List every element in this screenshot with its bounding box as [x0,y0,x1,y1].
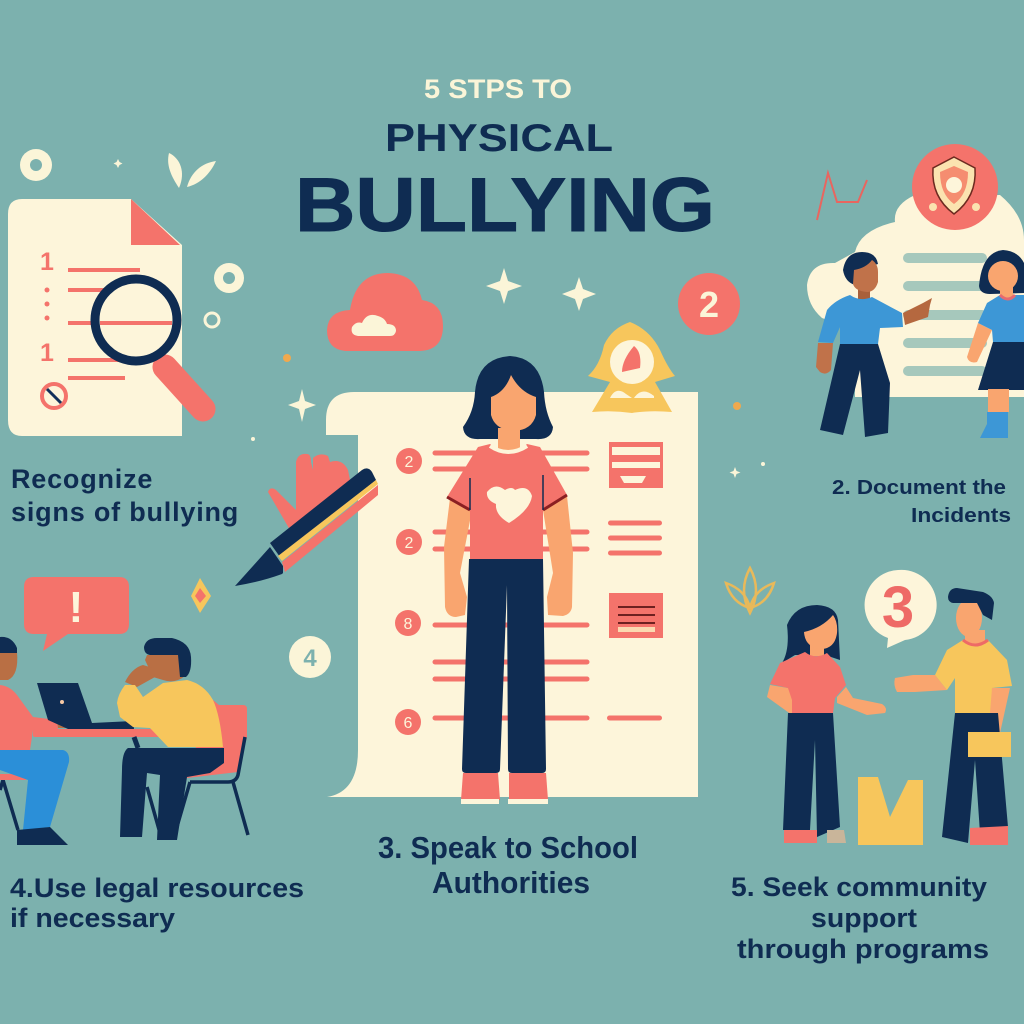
icon: small circle badge: 4 [303,645,317,672]
panel: central list document: 6 [404,715,413,732]
text: step 1 label: Recognize [11,464,153,494]
icon: ribbon award [588,322,675,413]
badge: number 2: 2 [699,284,719,325]
text: step 4 label: if necessary [10,903,175,933]
title [295,74,715,248]
figure: central student [444,356,573,804]
shoes [461,773,500,800]
icon: small circle badge [289,636,331,678]
speech bubble: exclamation [24,577,129,651]
arms [444,498,472,617]
figure: girl in coral [767,605,886,843]
text: step 3 label: 3. Speak to School [378,830,638,865]
title: BULLYING [295,163,715,248]
text: step 5 label: support [811,903,917,933]
text: step 5 label: through programs [737,934,989,964]
icon: cloud [327,273,443,351]
text: step 5 label: 5. Seek community [731,872,987,902]
scene: step 5 two people talking [767,588,1012,845]
panel: step 1 document with magnifier: 1 [40,339,54,367]
figure: girl [967,250,1024,438]
decorative icons top left [20,149,244,327]
sparkles center [251,268,765,478]
speech bubble: number 3: 3 [882,575,914,640]
person right [145,655,185,681]
chair left [0,780,18,830]
text: step 2 label: 2. Document the [832,477,1006,499]
panel: step 2 cloud document [807,144,1024,438]
laptop [37,683,134,729]
speech bubble: exclamation: ! [69,583,83,632]
icon: magnifying glass [95,279,203,409]
panel: step 1 document with magnifier: 1 [40,248,54,276]
panel: central list document [326,322,698,797]
text: step 1 label: signs of bullying [11,497,239,527]
desk [33,729,183,737]
title: 5 STPS TO [424,74,572,104]
icon: leaf sprig [726,568,774,613]
text: step 3 label: Authorities [432,865,590,900]
neck [498,428,520,450]
icon: small white cloud [352,315,396,336]
person left [0,652,17,680]
face [491,375,536,431]
figure: man in yellow [894,588,1012,845]
panel: central list document: 8 [404,616,413,633]
text: step 4 label: 4.Use legal resources [10,873,304,903]
icon: diamond sparkle [191,578,211,613]
panel: step 1 document with magnifier [8,199,203,436]
shirt heart [487,486,532,523]
text: step 2 label: Incidents [911,505,1011,527]
box [858,777,923,845]
badge: number 2 [678,273,740,335]
list rows right [607,442,663,720]
trousers [462,559,546,773]
icon: shield badge [912,144,998,230]
hair [463,356,553,439]
panel: central list document: 2 [405,535,414,552]
scene: step 4 two people at desk [0,637,248,845]
chair right [187,700,247,778]
panel: central list document: 2 [405,454,414,471]
doodle scribble [817,173,867,220]
shirt [447,444,567,559]
figure: boy pointing [816,252,932,437]
list rows left [435,453,587,718]
title: PHYSICAL [385,117,613,160]
speech bubble: number 3 [865,570,937,648]
icon: hand and pencil [235,454,378,586]
